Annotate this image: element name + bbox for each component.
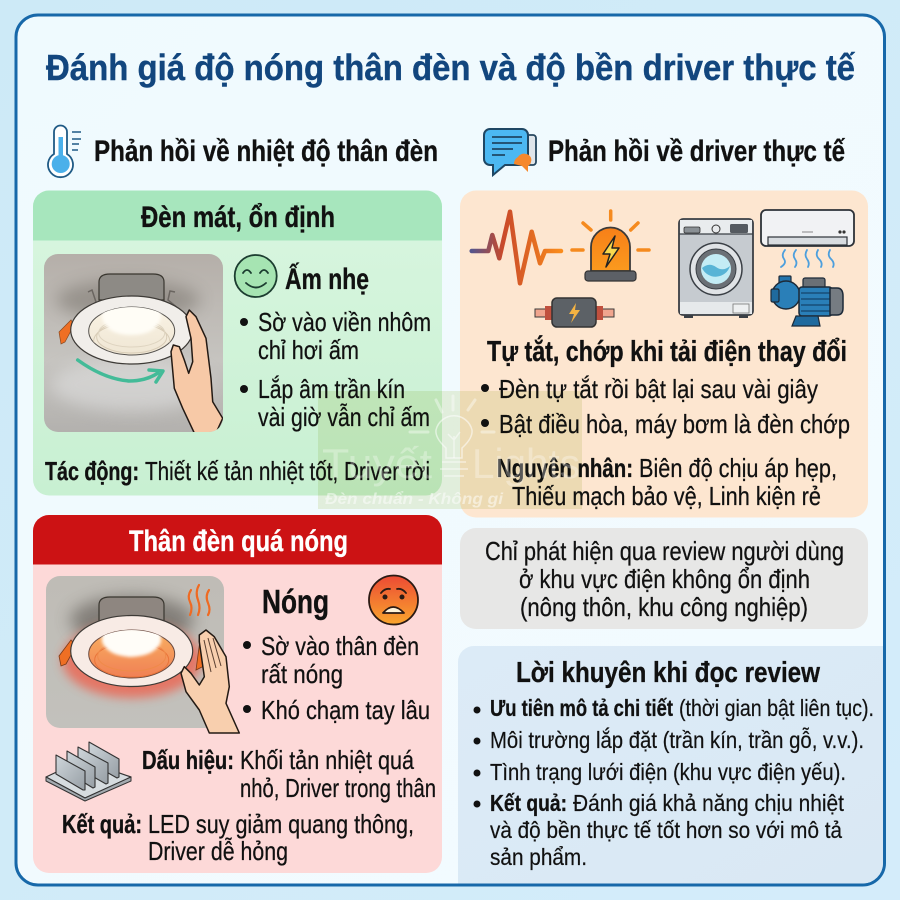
status label: slightly warm: Ấm nhẹ: [285, 262, 369, 296]
signs note: nhỏ, Driver trong thân: [240, 773, 436, 803]
result note: [62, 809, 414, 866]
bullet list: hot lamp: [243, 631, 430, 725]
cause note: Thiếu mạch bảo vệ, Linh kiện rẻ: [512, 481, 821, 511]
bullet list: cool lamp: vài giờ vẫn chỉ ấm: [258, 402, 430, 432]
icon: voltage pulse: [472, 212, 561, 283]
watermark: Tuyết: [322, 440, 432, 487]
bullet list: cool lamp: [240, 307, 431, 432]
bullet list: cool lamp: Sờ vào viền nhôm: [258, 307, 431, 337]
icon: washing machine: [679, 219, 753, 318]
bullet list: advice: sản phẩm.: [490, 844, 587, 870]
result note: LED suy giảm quang thông,: [148, 809, 414, 839]
heading: body temperature feedback: Phản hồi về nhiệt độ thân đèn: [94, 135, 438, 168]
signs note: [142, 745, 436, 803]
status label: hot: Nóng: [262, 583, 329, 620]
illustration: hot lamp with red glow: [46, 576, 239, 733]
panel header bar: [33, 190, 442, 240]
impact note: Tác động:: [45, 456, 139, 486]
panel background: [33, 515, 442, 873]
signs note: Khối tản nhiệt quá: [240, 745, 414, 775]
watermark: Lights: [472, 440, 580, 487]
bullet list: cool lamp: Lắp âm trần kín: [258, 374, 405, 404]
icon: warning siren: [572, 211, 649, 281]
icon: smiling face: [235, 255, 277, 297]
icon: air conditioner with airflow: [761, 210, 854, 267]
result note: Driver dễ hỏng: [148, 836, 288, 866]
bullet list: advice: và độ bền thực tế tốt hơn so với mô tả: [490, 817, 842, 843]
bullet list: hot lamp: Khó chạm tay lâu: [261, 695, 430, 725]
bullet list: hot lamp: rất nóng: [261, 659, 343, 689]
bullet list: hot lamp: Sờ vào thân đèn: [261, 631, 419, 661]
result note: Kết quả:: [62, 809, 142, 839]
icon: distressed face: [369, 576, 418, 624]
impact note: Thiết kế tản nhiệt tốt, Driver rời: [145, 456, 430, 486]
icon: chat bubbles: [484, 129, 536, 175]
panel heading: Đèn mát, ổn định: [141, 201, 335, 234]
watermark: [318, 391, 582, 509]
panel background: [33, 190, 442, 496]
icon: water pump: [771, 276, 843, 326]
icon: heat sink: [46, 742, 131, 801]
bullet list: advice: [474, 695, 874, 870]
panel: detection note: Chỉ phát hiện qua review người dùng: [485, 536, 844, 566]
cause note: Biên độ chịu áp hẹp,: [639, 453, 837, 483]
panel header bar: [33, 515, 442, 564]
bullet list: advice: Đánh giá khả năng chịu nhiệt: [573, 790, 845, 816]
panel: cool lamp: [33, 190, 442, 496]
icon: driver module: [535, 298, 614, 327]
panel: detection note: ở khu vực điện không ổn định: [519, 564, 810, 594]
panel: review advice: [458, 646, 883, 884]
panel: overheating lamp: [33, 515, 442, 873]
bullet list: advice: Kết quả:: [490, 790, 567, 816]
panel background: [460, 190, 868, 518]
watermark: Đèn chuẩn - Không gi: [325, 490, 504, 508]
panel: driver symptoms: [460, 190, 868, 518]
panel: detection note: (nông thôn, khu công nghiệp): [520, 592, 808, 622]
bullet list: cool lamp: chỉ hơi ấm: [258, 335, 359, 365]
bullet list: advice: Ưu tiên mô tả chi tiết: [490, 695, 673, 721]
impact note: [45, 456, 430, 486]
bullet list: driver symptoms: [481, 374, 850, 439]
panel heading: Thân đèn quá nóng: [129, 525, 348, 558]
icon: thermometer: [48, 126, 81, 177]
cause note: Nguyên nhân:: [497, 453, 633, 483]
signs note: Dấu hiệu:: [142, 745, 234, 775]
panel heading: Lời khuyên khi đọc review: [516, 657, 820, 689]
illustration: cool lamp touched by a hand: [44, 254, 223, 433]
cause note: [497, 453, 837, 511]
panel background: [458, 646, 883, 884]
bullet list: advice: Tình trạng lưới điện (khu vực điện yếu).: [490, 759, 846, 785]
panel: detection note: [460, 528, 868, 629]
bullet list: driver symptoms: Đèn tự tắt rồi bật lại sau vài giây: [499, 374, 818, 404]
